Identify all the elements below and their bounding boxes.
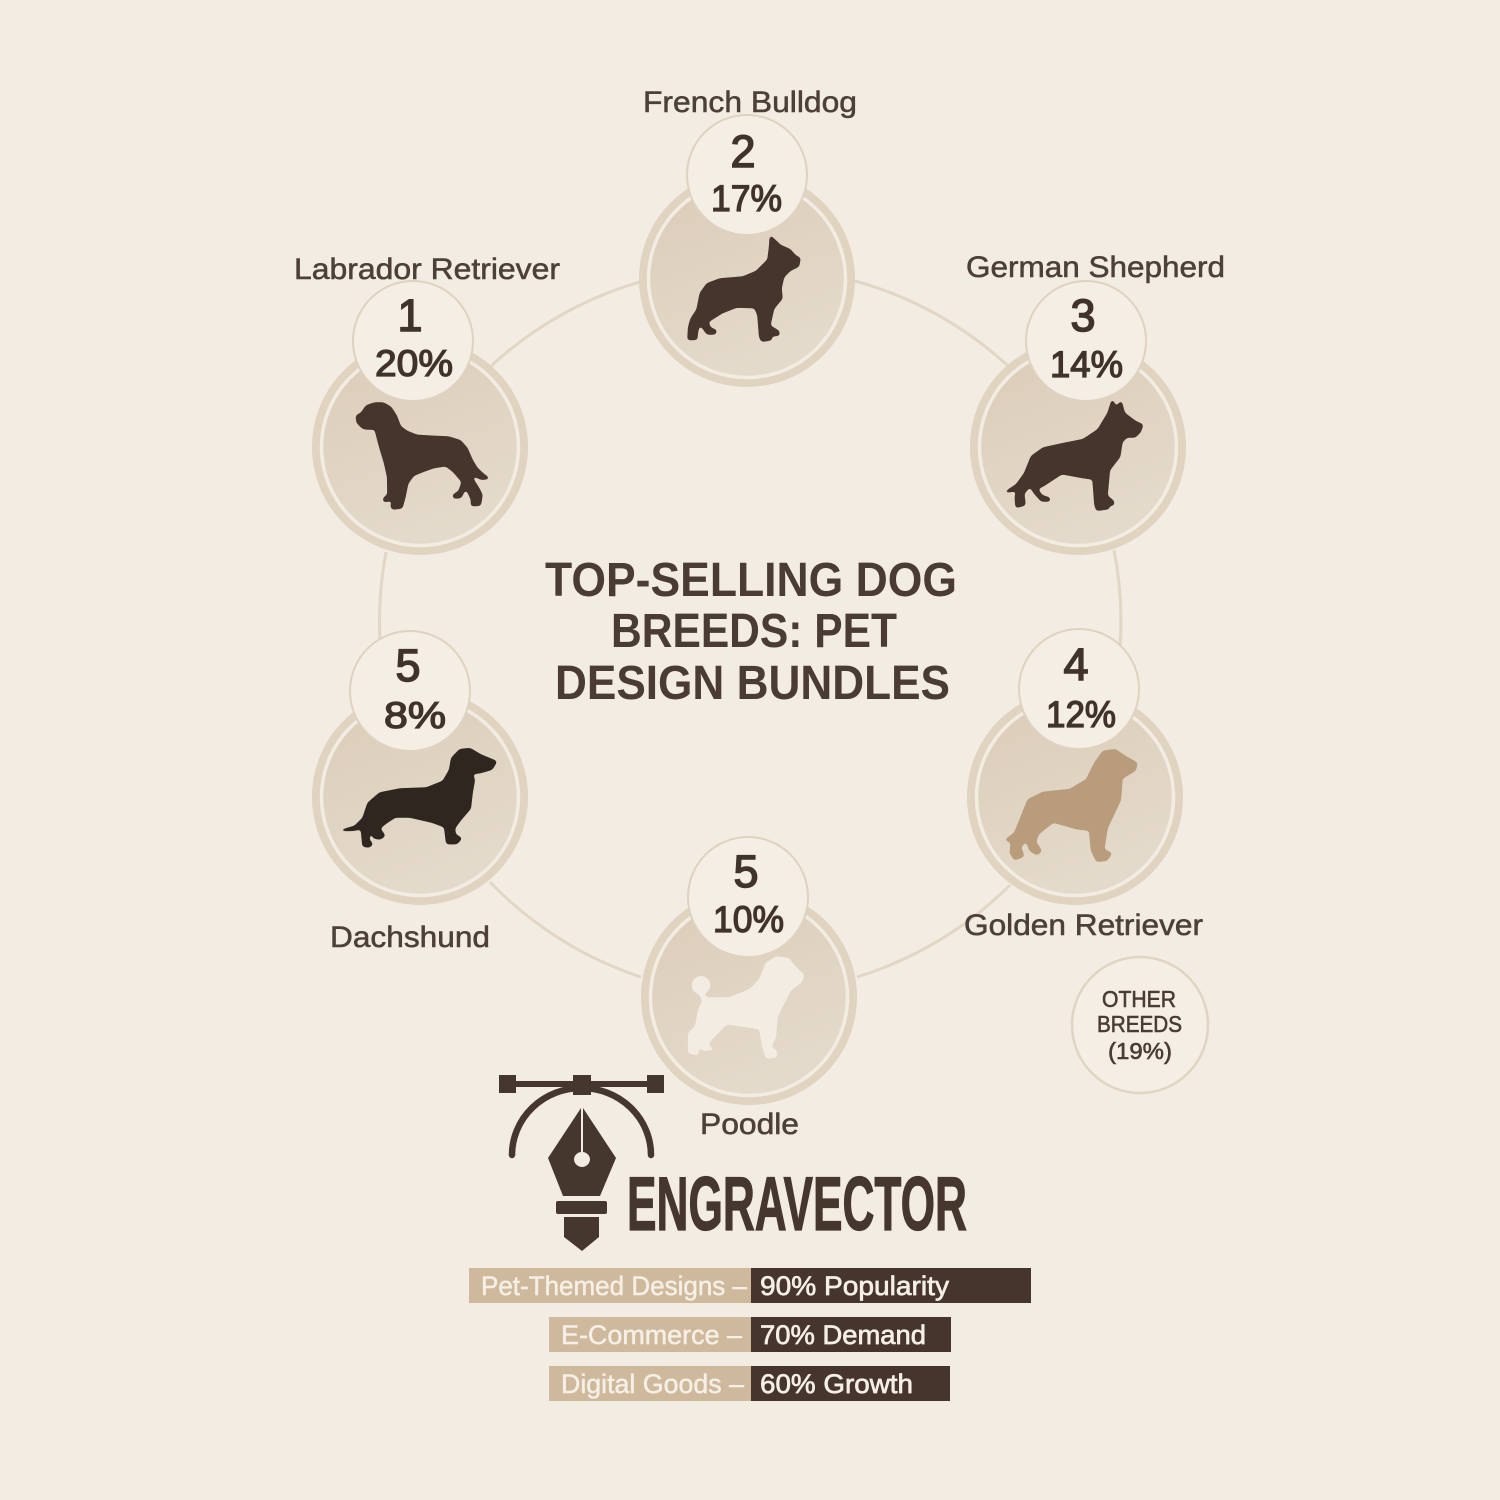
badge: rank and share <box>1026 281 1146 401</box>
label: Dachshund: Dachshund <box>330 921 490 954</box>
label: Poodle: Poodle <box>700 1108 799 1141</box>
badge: rank and share <box>688 837 808 957</box>
label: French Bulldog: French Bulldog <box>643 86 857 119</box>
logo wordmark: ENGRAVECTOR <box>627 1162 967 1247</box>
stat bar: pet-themed designs: 90% Popularity <box>760 1271 950 1301</box>
stat bar: e-commerce: 70% Demand <box>760 1320 926 1350</box>
badge: rank and share: 2 <box>730 126 756 177</box>
icon: golden retriever silhouette <box>1006 750 1137 861</box>
icon: pen tool nib <box>499 1075 664 1251</box>
icon: german shepherd silhouette <box>1006 401 1142 510</box>
stat bar: digital goods: 60% Growth <box>760 1369 913 1399</box>
badge: rank and share <box>350 631 470 751</box>
node: Dachshund <box>312 631 528 954</box>
badge: rank and share: 10% <box>713 899 784 940</box>
stat bar: pet-themed designs: Pet-Themed Designs – <box>481 1271 747 1301</box>
badge: rank and share: 17% <box>711 178 782 219</box>
icon: dachshund silhouette <box>342 749 496 847</box>
logo: Engravector <box>499 1075 967 1251</box>
stat bar: e-commerce: E-Commerce – <box>561 1320 742 1350</box>
node: Poodle <box>641 837 857 1105</box>
node: German Shepherd <box>966 251 1225 555</box>
callout: other breeds: (19%) <box>1108 1038 1172 1064</box>
stat bar: pet-themed designs <box>469 1268 1031 1303</box>
node: Golden Retriever <box>964 629 1203 942</box>
badge: rank and share: 5 <box>395 640 421 691</box>
title: DESIGN BUNDLES <box>555 657 950 710</box>
badge: rank and share <box>353 281 473 401</box>
stat bars <box>469 1268 1031 1401</box>
badge: rank and share: 8% <box>384 695 446 736</box>
badge: rank and share: 14% <box>1050 344 1123 385</box>
badge: rank and share <box>687 115 807 235</box>
badge: rank and share: 20% <box>375 343 453 384</box>
icon: poodle silhouette <box>689 957 803 1058</box>
stat bar: digital goods: Digital Goods – <box>561 1369 744 1399</box>
callout: other breeds: BREEDS <box>1097 1011 1182 1037</box>
connecting ring arcs <box>380 281 1121 977</box>
label: German Shepherd: German Shepherd <box>966 251 1225 284</box>
badge: rank and share: 3 <box>1070 290 1096 341</box>
node: French Bulldog <box>639 86 857 387</box>
label: Golden Retriever: Golden Retriever <box>964 909 1203 942</box>
callout: other breeds <box>1072 957 1208 1093</box>
badge: rank and share <box>1019 629 1139 749</box>
icon: labrador silhouette <box>357 403 488 509</box>
node: Labrador Retriever <box>294 253 560 555</box>
stat bar: e-commerce <box>549 1317 951 1352</box>
title: BREEDS: PET <box>611 605 897 658</box>
badge: rank and share: 5 <box>733 846 759 897</box>
stat bar: digital goods <box>549 1366 950 1401</box>
badge: rank and share: 12% <box>1046 694 1116 735</box>
callout: other breeds: OTHER <box>1102 986 1176 1012</box>
badge: rank and share: 1 <box>397 290 423 341</box>
icon: french bulldog silhouette <box>688 237 800 341</box>
label: Labrador Retriever: Labrador Retriever <box>294 253 560 286</box>
title: TOP-SELLING DOG <box>545 554 957 607</box>
badge: rank and share: 4 <box>1063 639 1089 690</box>
title <box>545 554 957 710</box>
